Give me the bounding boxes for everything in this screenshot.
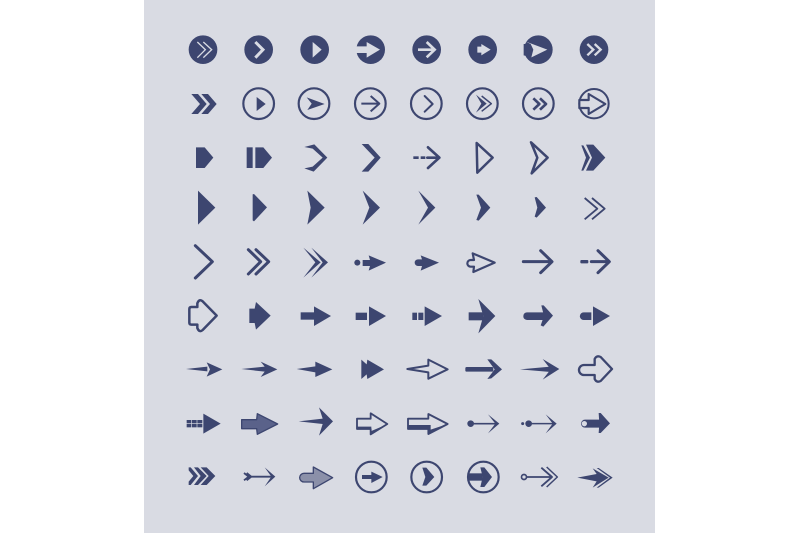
icon: rounded stub arrow [580, 306, 610, 326]
icon: bar and pentagon [247, 147, 272, 168]
icon: ring block arrow [468, 462, 499, 492]
panel: grey background [144, 0, 655, 533]
icon: double thin swept chevron [303, 248, 328, 278]
icon: hatched arrow [242, 414, 278, 434]
icon: outline tapered arrow [407, 360, 448, 379]
icon: small rounded arrow [415, 255, 439, 271]
icon: rounded chevron [535, 197, 546, 218]
icon: solid fat arrow [249, 302, 271, 330]
icon: line chevron [195, 246, 212, 278]
icon: ring outline arrow [579, 89, 609, 118]
icon: circle block arrow [355, 35, 385, 64]
icon: rounded triangle [253, 194, 267, 221]
icon: dashed block arrow [412, 306, 442, 326]
icon: ring double bold chevron [523, 88, 554, 119]
icon: dot arrow [354, 255, 386, 271]
icon: bold chevron [362, 144, 381, 172]
icon: swept double arrow [577, 468, 613, 488]
icon: double thin chevron [585, 198, 605, 219]
icon: tall triangle [198, 191, 215, 225]
icon: notched triangle [307, 191, 325, 225]
icon: needle arrow [520, 359, 559, 380]
icon: outline round arrow [579, 356, 612, 382]
icon: ring play [243, 88, 274, 119]
icon: split line arrow [580, 251, 609, 273]
icon: kite outline [531, 142, 548, 173]
icon: folded chevron [304, 144, 327, 172]
icon: block arrow [301, 306, 331, 326]
icon: ring chevron [411, 88, 442, 119]
icon: circle chevron [244, 35, 273, 64]
icon: line arrow [523, 251, 552, 273]
icon: dashed arrow [413, 147, 439, 168]
icon: fast forward [361, 360, 384, 379]
icon: double chevron [191, 94, 217, 114]
icon: circle double chevron bold [580, 35, 608, 64]
icon: thin swept chevron [418, 191, 435, 225]
icon: tapered arrow one [186, 362, 222, 377]
icon: tapered arrow three [297, 362, 332, 377]
icon: ring arrow [355, 88, 386, 119]
icon: outline dart arrow [467, 253, 495, 272]
icon: swept long arrow [299, 407, 333, 436]
icon: tapered arrow two [241, 362, 277, 377]
icon: bold arrow with ring tail [581, 413, 610, 433]
icon: short block arrow [356, 306, 386, 326]
icon: triple chevron [189, 467, 215, 485]
icon: pin arrow [467, 414, 499, 433]
icon: ring dart [299, 88, 329, 119]
icon: circle arrow [412, 35, 441, 64]
icon: outline shadow arrow [357, 413, 387, 435]
icon: triangle outline [477, 143, 493, 173]
icon: grid tail arrow [187, 414, 221, 434]
icon: ring double thin chevron [467, 88, 498, 119]
icon: circle dart [524, 35, 553, 64]
icon: swept chevron [363, 191, 380, 225]
icon: rounded bold arrow [523, 305, 553, 327]
icon: ring bold chevron [411, 462, 442, 492]
icon: circle fat arrow [468, 35, 497, 64]
icon: ring small arrow [356, 462, 387, 492]
icon: outline fat arrow [189, 300, 217, 331]
icon: short chevron [476, 195, 490, 221]
icon: ring tail double arrow [521, 467, 557, 487]
icon: circle play [300, 35, 329, 64]
icon: spiked arrow [469, 299, 495, 333]
icon: circle double chevron [189, 35, 217, 64]
icon: feathered arrow [244, 467, 275, 486]
icon: long bold arrow [465, 359, 502, 379]
icon: outline shadow long arrow [408, 414, 448, 434]
icon: arrowhead with thin chevron [581, 145, 605, 171]
icon: dotted pin arrow [521, 414, 557, 433]
icon: double line chevron [248, 250, 269, 274]
icon: pentagon [196, 147, 213, 168]
icon: grey arrow [300, 467, 333, 489]
